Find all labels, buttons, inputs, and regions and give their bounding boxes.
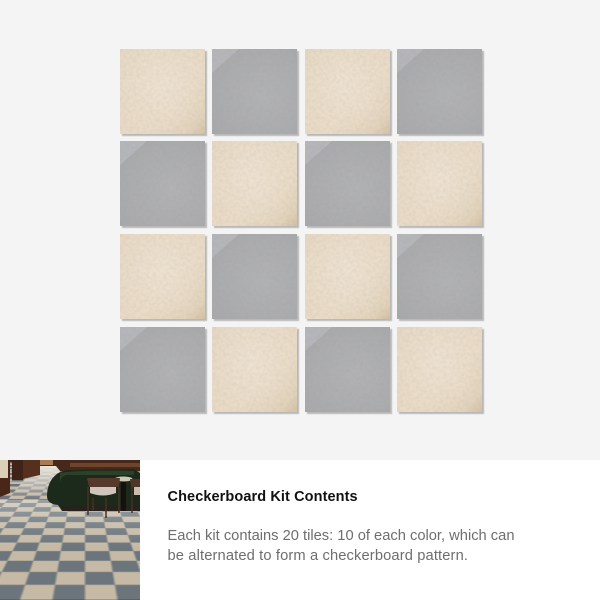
tile row 1 col 4 grey [397,49,482,134]
tile row 3 col 2 grey [212,234,297,319]
text block: be alternated to form a checkerboard pattern. [168,548,468,564]
heading: Checkerboard Kit Contents [168,488,358,504]
photo: lounge with checkerboard floor [0,460,140,600]
tile row 2 col 2 cream [212,141,297,226]
far floor highlight [10,466,60,500]
tile row 2 col 4 cream [397,141,482,226]
tile row 4 col 3 grey [305,327,390,412]
tile row 4 col 2 cream [212,327,297,412]
text block: Each kit contains 20 tiles: 10 of each color, which can [168,528,514,544]
sofa shadow [56,502,140,511]
tile row 2 col 1 grey [120,141,205,226]
left columns [0,460,10,497]
tile row 2 col 3 grey [305,141,390,226]
tile row 1 col 3 cream [305,49,390,134]
back wall [40,460,140,471]
tile row 4 col 1 grey [120,327,205,412]
table [114,476,132,511]
panel: tile grid [0,0,600,460]
tile row 1 col 2 grey [212,49,297,134]
right chair [130,479,140,513]
text block [168,528,514,564]
tile row 1 col 1 cream [120,49,205,134]
chair [87,478,120,518]
tile surface texture [120,50,482,412]
tile row 4 col 4 cream [397,327,482,412]
sofa [47,469,140,505]
tile row 3 col 3 cream [305,234,390,319]
tile row 3 col 1 cream [120,234,205,319]
tile row 3 col 4 grey [397,234,482,319]
